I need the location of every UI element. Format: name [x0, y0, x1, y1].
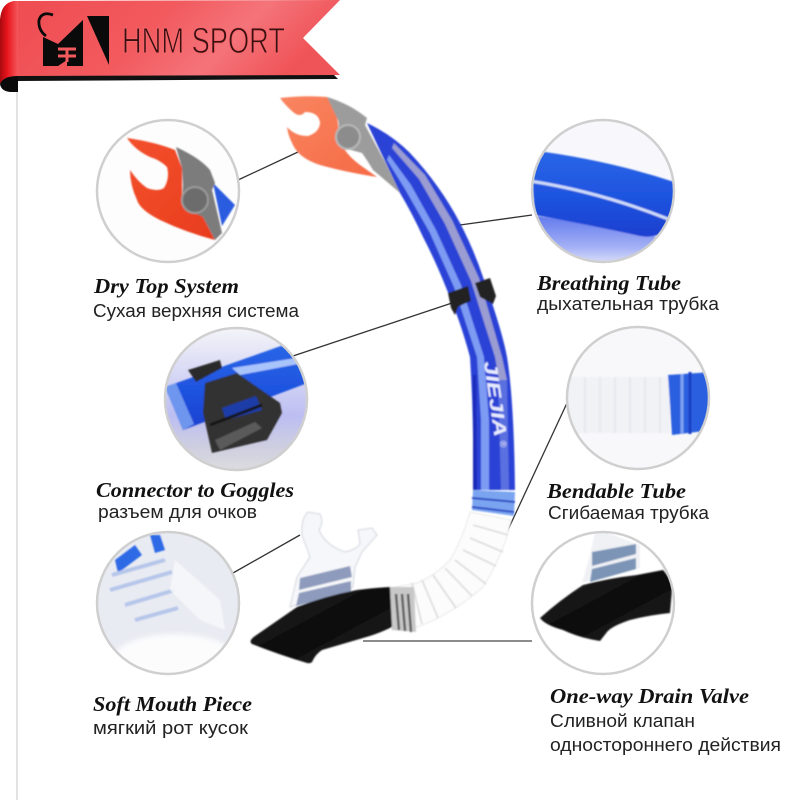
lower light area [538, 215, 656, 261]
panel: breathing tube detail [530, 120, 680, 270]
blue end [668, 372, 712, 435]
clear mouthpiece flange [290, 512, 377, 607]
label: one-way drain valve: One-way Drain Valve [550, 684, 749, 708]
breathing tube [367, 123, 515, 490]
tube brand text: JIEJIA [480, 360, 510, 438]
label: soft mouth piece: мягкий рот кусок [93, 718, 248, 738]
label: bendable tube: Bendable Tube [546, 479, 686, 503]
goggle clip right [475, 278, 496, 304]
white stripe [530, 181, 668, 219]
label: soft mouth piece [93, 692, 252, 738]
black clip top [188, 360, 222, 382]
label: soft mouth piece: Soft Mouth Piece [93, 692, 252, 716]
tube lower band [498, 380, 509, 490]
label: dry top system: Dry Top System [93, 274, 239, 298]
blue flashes [115, 535, 165, 573]
label: dry top system: Сухая верхняя система [93, 301, 300, 321]
ribbon curl [0, 76, 18, 92]
dry top grey housing [327, 97, 400, 193]
registered mark: ® [498, 440, 509, 448]
label: breathing tube: Breathing Tube [536, 271, 681, 295]
mouthpiece blue bands [296, 566, 352, 606]
label: one-way drain valve: Сливной клапан [550, 711, 695, 731]
label: breathing tube [536, 271, 720, 314]
highlight [232, 358, 298, 375]
tube lavender band [392, 143, 507, 380]
tube collar [472, 490, 515, 516]
bendable bellows [390, 512, 511, 630]
label: one-way drain valve [550, 684, 781, 755]
left margin line [16, 90, 18, 800]
ribbon banner with brand logo [0, 0, 340, 92]
red guard [127, 138, 215, 240]
panel: drain valve detail [532, 532, 674, 674]
tube end cap [165, 383, 194, 430]
blue tube [213, 183, 235, 226]
brand name: HNM SPORT [122, 20, 285, 61]
blue band [530, 150, 680, 237]
clear ribs [110, 560, 178, 620]
dry top knob [336, 125, 360, 149]
blue tube [175, 345, 304, 430]
black valve [540, 570, 672, 641]
snorkel main illustration [251, 96, 515, 663]
clear part [582, 532, 640, 583]
blue bands [590, 544, 636, 582]
tube dark left edge [473, 375, 477, 490]
label: bendable tube: Сгибаемая трубка [548, 503, 710, 523]
bellows ribs [412, 525, 508, 624]
lower glow [118, 634, 224, 673]
black drain valve [251, 587, 392, 663]
panel: dry top detail [97, 120, 239, 262]
label: dry top system [93, 274, 300, 321]
label: connector to goggles [96, 478, 294, 522]
knob [182, 187, 208, 213]
panel: bendable tube detail [565, 327, 712, 469]
logo mark [39, 14, 109, 66]
snorkel mouth guard red [280, 96, 377, 177]
label: breathing tube: дыхательная трубка [537, 294, 720, 314]
label: connector to goggles: Connector to Goggles [96, 478, 294, 502]
ribbon fold [0, 1, 18, 84]
leader lines [233, 152, 567, 641]
panel: connector detail [165, 328, 310, 470]
grey housing [176, 147, 222, 240]
label: connector to goggles: разъем для очков [98, 502, 257, 522]
label: one-way drain valve: одностороннего действия [550, 735, 781, 755]
tube light stripe [387, 155, 489, 490]
ribbon body [0, 0, 340, 84]
label: bendable tube [546, 479, 710, 523]
black clip body [203, 373, 282, 453]
clip window [222, 396, 262, 420]
bellows collar [390, 587, 416, 632]
clear bellows [582, 376, 672, 433]
panel: soft mouth piece detail [97, 532, 239, 686]
ribbon shadow [18, 75, 338, 81]
goggle clip left [448, 286, 471, 315]
